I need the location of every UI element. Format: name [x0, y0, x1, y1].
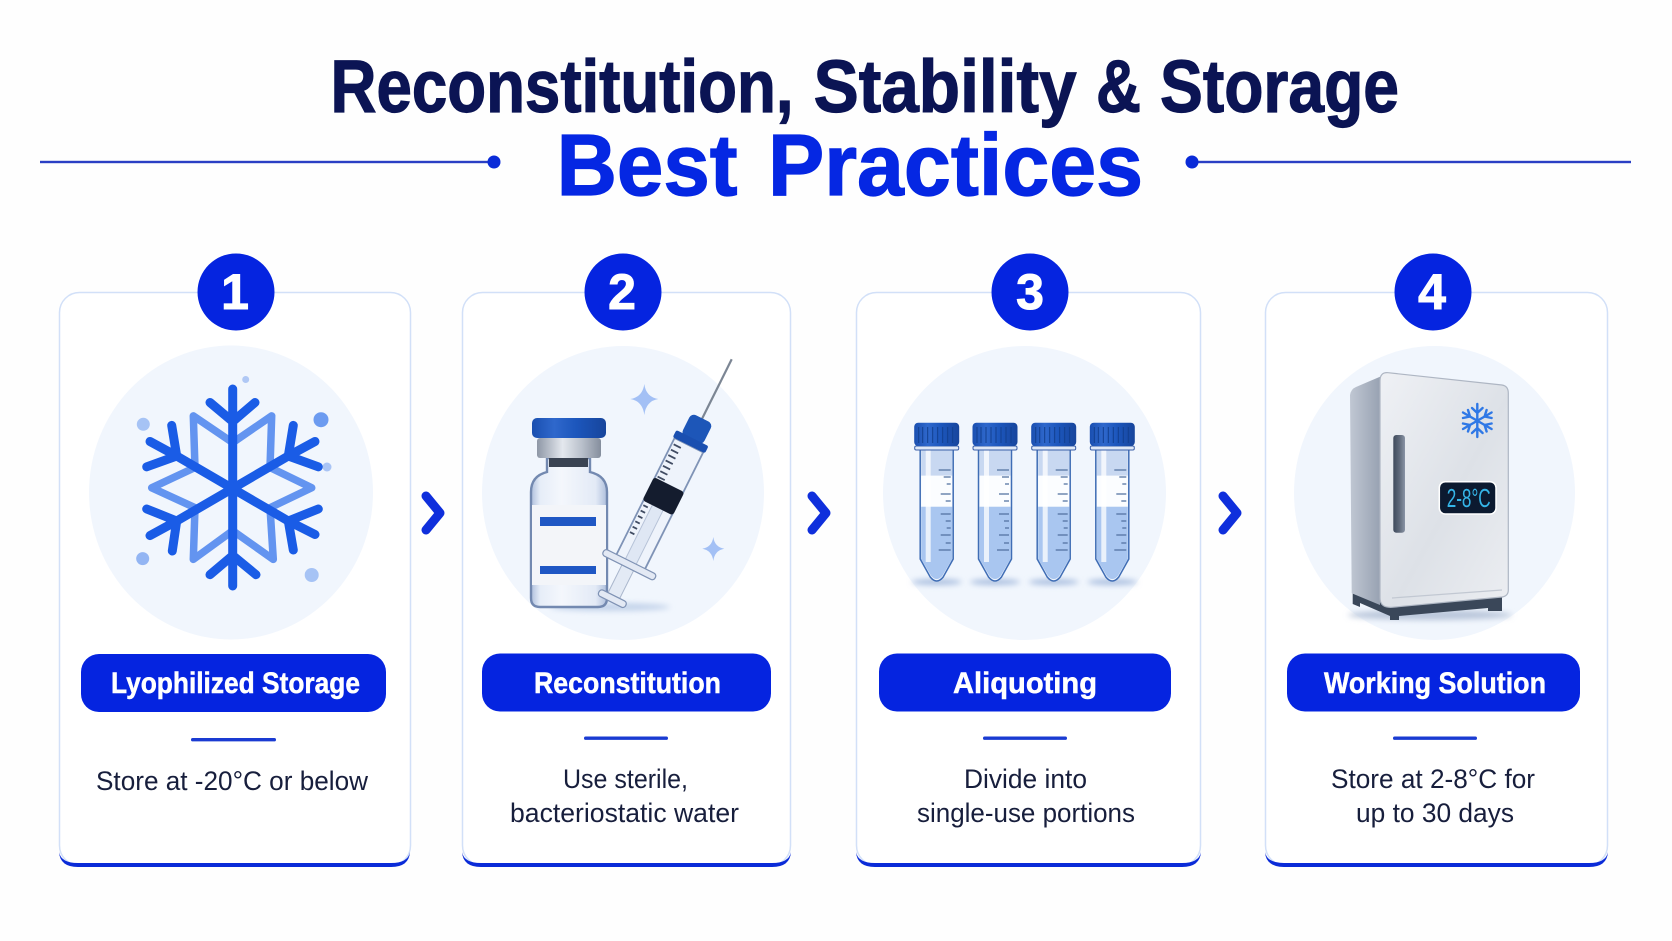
- label: Aliquoting: [879, 654, 1171, 712]
- icon: vial and syringe: [482, 346, 764, 640]
- title divider right: [1186, 156, 1631, 168]
- sparkles: [630, 384, 724, 561]
- arrow 2: [812, 496, 826, 530]
- step number 1: [198, 254, 274, 330]
- label: Lyophilized Storage: [81, 654, 386, 712]
- small snowflake: [1463, 404, 1492, 437]
- step number 2: [584, 254, 662, 330]
- title divider left: [40, 156, 500, 168]
- step number 4: 4: [1418, 264, 1446, 320]
- icon: refrigerator: [1294, 346, 1575, 640]
- title: [330, 45, 1399, 214]
- icon: four tubes: [883, 346, 1166, 640]
- description: single-use portions: [917, 798, 1135, 828]
- description: [1331, 764, 1535, 828]
- description: [510, 764, 739, 828]
- icon: snowflake: [89, 346, 373, 640]
- description: up to 30 days: [1356, 798, 1514, 828]
- title: Practices: [768, 117, 1143, 214]
- label: Reconstitution: Reconstitution: [534, 667, 721, 700]
- step number 3: 3: [1016, 264, 1044, 320]
- title: &: [1096, 45, 1141, 128]
- description: Store at 2-8°C for: [1331, 764, 1535, 794]
- syringe: [585, 346, 758, 615]
- step number 3: [992, 254, 1068, 330]
- label: Aliquoting: Aliquoting: [953, 667, 1097, 700]
- step number 4: [1394, 254, 1472, 330]
- step number 2: 2: [608, 264, 636, 320]
- panel: step 3 aliquoting: [856, 254, 1201, 867]
- title: Storage: [1160, 45, 1399, 128]
- description: Divide into: [964, 764, 1087, 794]
- title: Reconstitution,: [330, 45, 794, 128]
- panel: step 1 lyophilized storage: [59, 254, 410, 867]
- step number 1: 1: [221, 264, 249, 320]
- title: Best: [557, 117, 738, 214]
- arrow 3: [1223, 496, 1237, 530]
- vial: [531, 418, 607, 607]
- label: Working Solution: Working Solution: [1324, 667, 1546, 700]
- label: Reconstitution: [482, 654, 771, 712]
- description: [917, 764, 1135, 828]
- arrow 1: [426, 496, 440, 530]
- label: Working Solution: [1287, 654, 1580, 712]
- title: Stability: [814, 45, 1077, 128]
- panel: step 2 reconstitution: [462, 254, 791, 867]
- description: Use sterile,: [563, 764, 688, 794]
- description: Store at -20°C or below: [96, 766, 368, 796]
- icon: refrigerator: 2-8°C: [1447, 483, 1491, 513]
- description: bacteriostatic water: [510, 798, 739, 828]
- label: Lyophilized Storage: Lyophilized Storage: [111, 667, 360, 700]
- panel: step 4 working solution: [1265, 254, 1608, 867]
